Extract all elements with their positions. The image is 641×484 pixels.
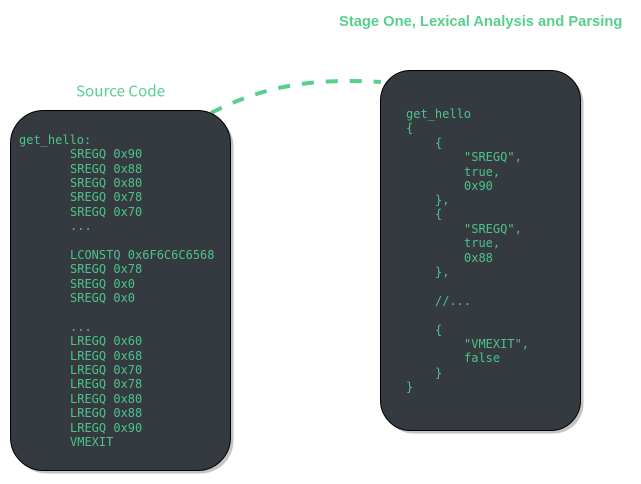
parsed output listing: }, [435,193,449,207]
source code listing: SREGQ 0x0 [70,291,135,305]
source code listing: SREGQ 0x0 [70,277,135,291]
source code listing: SREGQ 0x78 [70,262,142,276]
heading: source code: Source Code [76,80,165,102]
parsed output listing: "VMEXIT", [464,337,529,351]
source code listing: SREGQ 0x88 [70,162,142,176]
source code listing: LCONSTQ 0x6F6C6C6568 [70,248,214,262]
parsed output listing: false [464,351,500,365]
source code listing: ... [70,219,92,233]
parsed output listing: }, [435,265,449,279]
parsed output listing: 0x90 [464,179,493,193]
source code listing: LREGQ 0x88 [70,406,142,420]
parsed output listing: { [406,121,413,135]
source code listing: SREGQ 0x70 [70,205,142,219]
panel: source code [10,110,234,474]
source code listing: get_hello: [19,133,91,147]
source code listing: SREGQ 0x80 [70,176,142,190]
source code listing: LREGQ 0x70 [70,363,142,377]
parsed output listing: } [435,366,442,380]
parsed output listing: "SREGQ", [464,150,522,164]
source code listing: LREGQ 0x78 [70,377,142,391]
panel: parsed output [380,70,584,434]
source code listing: VMEXIT [70,435,113,449]
parsed output listing: true, [464,165,500,179]
parsed output listing: { [435,323,442,337]
source code listing: ... [70,320,92,334]
source code listing [19,133,214,449]
title: Stage One, Lexical Analysis and Parsing [339,14,622,30]
parsed output listing: { [435,207,442,221]
parsed output listing: //... [435,294,471,308]
parsed output listing: get_hello [406,107,471,121]
source code listing: LREGQ 0x90 [70,421,142,435]
parsed output listing: { [435,136,442,150]
parsed output listing: } [406,380,413,394]
parsed output listing [406,107,529,394]
source code listing: LREGQ 0x60 [70,334,142,348]
parsed output listing: true, [464,236,500,250]
arrow: dashed connector [211,81,381,113]
parsed output listing: "SREGQ", [464,222,522,236]
source code listing: SREGQ 0x78 [70,190,142,204]
source code listing: SREGQ 0x90 [70,147,142,161]
source code listing: LREGQ 0x80 [70,392,142,406]
source code listing: LREGQ 0x68 [70,349,142,363]
parsed output listing: 0x88 [464,251,493,265]
